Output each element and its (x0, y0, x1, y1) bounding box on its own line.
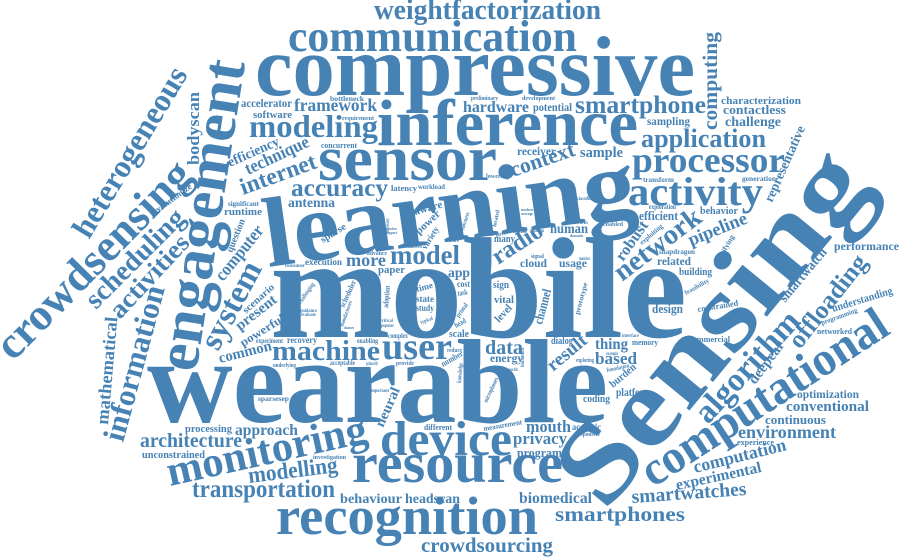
medium words: left side: bodyscan (184, 91, 203, 165)
small words: centre detail: enabling (357, 337, 378, 345)
small words: centre detail: experiment (256, 337, 284, 345)
word: context: context (507, 137, 579, 182)
medium words: right side: interface (622, 333, 639, 339)
small words: centre detail: dataset (344, 325, 354, 330)
small words: centre detail (256, 94, 624, 438)
medium words: centre: human (550, 222, 588, 237)
medium words: left side: accelerator (241, 98, 292, 110)
medium words: left side: common (217, 338, 274, 367)
medium words: centre: cloud (520, 256, 547, 270)
word: wearable: wearable (147, 315, 608, 448)
medium words: centre: sample (580, 145, 624, 161)
small words: centre detail: consumer (285, 263, 305, 269)
word: inference: inference (377, 87, 638, 160)
word: offloading: offloading (782, 248, 873, 354)
word: application: application (641, 124, 767, 153)
medium words: right side: based (595, 349, 638, 368)
medium words: right side: computation (691, 434, 788, 477)
small words: centre detail: important (370, 388, 389, 394)
small words: centre detail: limitation (521, 348, 526, 367)
small words: centre detail: responsive (576, 432, 600, 438)
small words: centre detail: requirement (342, 115, 375, 122)
medium words: right side: burden (607, 361, 639, 390)
medium words: right side: constrained (697, 298, 739, 314)
small words: centre detail: necessary (386, 218, 391, 233)
medium words: right side: commercial (689, 335, 731, 344)
small words: centre detail: average (521, 211, 533, 216)
medium words: centre: usage (559, 256, 588, 270)
medium words: right side: continuous (765, 412, 826, 427)
medium words: centre: energy (490, 351, 523, 365)
small words: centre detail: signal (531, 254, 544, 260)
medium words: centre: variety (419, 224, 441, 251)
medium words: left side: mathematical (92, 316, 121, 425)
medium words: right side: feasibility (684, 277, 711, 297)
medium words: centre: many (494, 234, 516, 245)
small words: centre detail: enable (513, 230, 528, 235)
medium words: right side: example (606, 352, 619, 357)
small words: centre detail: knowledge (456, 363, 465, 383)
medium words: centre: task (457, 287, 469, 298)
medium words: left side: processing (185, 423, 232, 435)
medium words: centre: potential (533, 102, 572, 114)
word: learning: learning (256, 129, 642, 289)
medium words: right side: foundation (606, 363, 630, 374)
medium words: right side: behavior (700, 206, 738, 217)
medium words: right side: exploring (576, 358, 594, 364)
small words: centre detail: microphones (482, 376, 500, 404)
word: heterogeneous: heterogeneous (64, 60, 194, 244)
medium words: right side: platform (616, 387, 652, 399)
word: internet: internet (236, 149, 320, 201)
medium words: left side: question (225, 217, 248, 254)
small words: centre detail: lowering (486, 173, 510, 180)
word: recognition: recognition (276, 486, 538, 546)
medium words: centre: adoption (381, 285, 392, 308)
word: network: network (608, 201, 708, 288)
medium words: left side: behaviour (340, 492, 402, 507)
medium words: centre: vital (494, 294, 514, 306)
medium words: right side: coding (583, 394, 610, 405)
medium words: centre: acoustic (572, 422, 601, 432)
small words: centre detail: popular (381, 324, 395, 329)
word: pipeline: pipeline (685, 209, 750, 251)
medium words: centre: concurrent (321, 141, 357, 150)
small words: centre detail: modern (521, 207, 533, 212)
word: scheduling: scheduling (79, 203, 191, 315)
small words: centre detail: window (386, 226, 397, 231)
medium words: centre: head (453, 316, 468, 330)
small words: centre detail: located (492, 209, 502, 227)
medium words: right side: characterization (721, 95, 801, 107)
medium words: right side: experience (737, 438, 774, 447)
medium words: left side: investigation (313, 454, 346, 461)
medium words: centre: cost (457, 279, 470, 289)
medium words: right side: networked (817, 327, 853, 336)
word: computational: computational (630, 298, 898, 497)
small words: centre detail: guidance (300, 308, 317, 314)
word: architecture: architecture (140, 431, 242, 452)
word: transportation: transportation (192, 476, 335, 503)
small words: centre detail: provide (396, 360, 414, 367)
word: computing: computing (698, 32, 722, 130)
word: machine: machine (272, 335, 380, 367)
small words: centre detail: primarily (366, 362, 378, 367)
medium words: centre: study (416, 304, 434, 314)
medium words: centre: mouth (526, 417, 571, 436)
medium words: right side: exploration (649, 203, 676, 211)
medium words: centre: power (413, 208, 443, 237)
medium words: left side: significant (228, 199, 259, 208)
medium words: left side (92, 91, 460, 507)
small words: centre detail: prototype (573, 282, 589, 316)
word: Sensing: Sensing (528, 122, 894, 529)
medium words: centre: scale (449, 329, 469, 340)
small words: centre detail: acceptable (330, 359, 355, 367)
small words: centre detail: development (522, 96, 555, 102)
medium words: centre: dialog (551, 336, 573, 347)
medium words: right side: snapdragon (659, 248, 695, 256)
small words: centre detail: workload (418, 183, 445, 191)
small words: centre detail: typical (420, 316, 434, 326)
word: smartwatches: smartwatches (631, 479, 747, 508)
small words: centre detail: challenging (297, 281, 317, 305)
medium words: left side: revolutionize (147, 181, 194, 219)
word: activity: activity (628, 169, 763, 214)
medium words: right side: generation (742, 174, 777, 183)
word: crowdsourcing: crowdsourcing (421, 534, 554, 557)
medium words: centre: receiver (517, 146, 556, 158)
word: modeling: modeling (249, 108, 378, 144)
small words: centre detail: reduce (447, 348, 462, 354)
medium words: right side: contactless (723, 102, 786, 117)
medium words: left side: efficiency (226, 135, 282, 171)
medium words: left side: runtime (224, 206, 262, 218)
word: resource: resource (352, 432, 563, 495)
word: information: information (96, 281, 172, 445)
small words: centre detail: domain (570, 233, 583, 238)
small words: centre detail: underlying (273, 362, 297, 369)
medium words: right side: challenge (725, 115, 781, 130)
medium words: centre: aware (413, 199, 444, 218)
medium words: left side: headscan (405, 492, 460, 507)
medium words: right side: related (657, 254, 691, 268)
small words: centre detail: monitor (579, 257, 590, 262)
word: algorithm: algorithm (687, 303, 808, 430)
medium words: right side: design (652, 301, 684, 316)
medium words: left side: sparsesep (258, 394, 289, 403)
small words: centre detail: measurement (483, 417, 523, 433)
small words: centre detail: classes (407, 244, 423, 250)
medium words: right side: sparsifying (711, 233, 736, 268)
medium words: centre: execution (305, 258, 343, 268)
medium words: centre: privacy (513, 429, 567, 448)
word: model: model (390, 240, 460, 270)
word: engagement: engagement (144, 54, 259, 375)
medium words: left side: computer (211, 221, 268, 285)
medium words: centre: biomedical (519, 490, 593, 507)
medium words: centre: state (416, 295, 434, 305)
medium words: centre: scheduler (338, 278, 358, 309)
small words: centre detail: future (447, 239, 460, 244)
small words: centre detail: critical (380, 318, 393, 324)
small words: centre detail: evaluate (301, 312, 316, 318)
word: sensor: sensor (318, 123, 497, 195)
medium words: left side: powerful (237, 311, 288, 350)
medium words: centre: time (415, 280, 434, 294)
small words: centre detail: manufacturers (339, 300, 354, 328)
medium words: right side: exploiting (638, 222, 665, 247)
small words: centre detail: method (495, 229, 512, 239)
word: mobile: mobile (270, 210, 687, 369)
medium words: left side: unconstrained (142, 450, 205, 461)
word: user: user (382, 326, 452, 368)
medium words: left side: more (346, 250, 386, 270)
word: accuracy: accuracy (291, 175, 388, 202)
medium words: left side: sparse (319, 221, 349, 246)
small words: centre detail: primal (454, 301, 470, 319)
medium words: centre: program (517, 445, 562, 460)
small words: centre detail: fairness (460, 211, 472, 231)
word: result: result (543, 330, 592, 376)
medium words: left side: framework (294, 95, 377, 115)
word: communication: communication (288, 12, 577, 61)
word: radio: radio (487, 217, 548, 270)
medium words: right side: efficient (639, 208, 679, 223)
medium words: right side: understanding (830, 285, 895, 315)
small words: centre detail: support (386, 230, 398, 235)
medium words: centre: sign (493, 280, 509, 291)
small words: centre detail: preliminary (471, 96, 498, 102)
medium words: right side: building (679, 266, 712, 278)
medium words: right side: deepear (745, 337, 789, 387)
small words: centre detail: frameworks (565, 220, 588, 226)
word: processor: processor (632, 140, 785, 180)
medium words: right side (576, 95, 900, 494)
medium words: left side: approach (235, 422, 298, 439)
medium words: right side: transform (643, 176, 674, 184)
small words: centre detail: advance (367, 250, 387, 257)
medium words: right side: smartwatch (776, 245, 830, 306)
word: smartphone: smartphone (575, 90, 706, 119)
small words: centre detail: classifier (577, 197, 594, 202)
medium words: centre: hardware (463, 99, 529, 116)
medium words: right side: conventional (786, 399, 869, 415)
medium words: right side: memory (632, 337, 659, 347)
word: smartphones: smartphones (555, 502, 685, 526)
small words: centre detail: complex (388, 332, 408, 340)
medium words: centre: app (448, 266, 470, 281)
medium words: left side: antenna (288, 196, 335, 211)
word: activities: activities (103, 228, 195, 324)
medium words: centre: paper (378, 264, 405, 276)
word: compressive: compressive (255, 20, 695, 114)
word: modelling: modelling (247, 452, 339, 488)
small words: centre detail: problem (530, 229, 545, 234)
medium words: centre: number (439, 348, 465, 369)
word: data: data (485, 337, 523, 359)
medium words: right side: performance (834, 239, 900, 253)
word: system: system (193, 255, 270, 356)
medium words: left side: scenario (241, 282, 277, 316)
small words: centre detail: enabled (603, 222, 624, 228)
medium words: right side: convolutional (632, 395, 665, 434)
medium words: centre: latency (391, 183, 418, 193)
medium words: right side: sampling (647, 116, 690, 128)
word: device: device (380, 411, 512, 466)
medium words: right side: optimization (797, 389, 860, 401)
medium words: right side: robust (612, 217, 652, 264)
medium words: left side: software (253, 110, 293, 121)
medium words: right side: experimental (674, 459, 764, 494)
medium words: right side: representative (761, 123, 808, 204)
medium words: centre: channel (530, 287, 554, 326)
medium words: right side: thing (595, 336, 628, 353)
medium words: right side: programming (820, 306, 859, 327)
small words: centre detail: specific (508, 368, 518, 373)
medium words: centre: neural (373, 385, 404, 430)
small words: centre detail: natural (483, 233, 493, 238)
medium words: centre: recovery (287, 335, 317, 345)
medium words: left side: technique (241, 131, 312, 179)
medium words: centre: level (492, 302, 515, 325)
word: monitoring: monitoring (162, 406, 372, 496)
medium words: centre (287, 99, 624, 507)
medium words: right side: environment (738, 422, 836, 442)
medium words: centre: different (424, 422, 452, 432)
medium words: left side: present (233, 292, 280, 334)
small words: centre detail: bottleneck (330, 94, 365, 103)
